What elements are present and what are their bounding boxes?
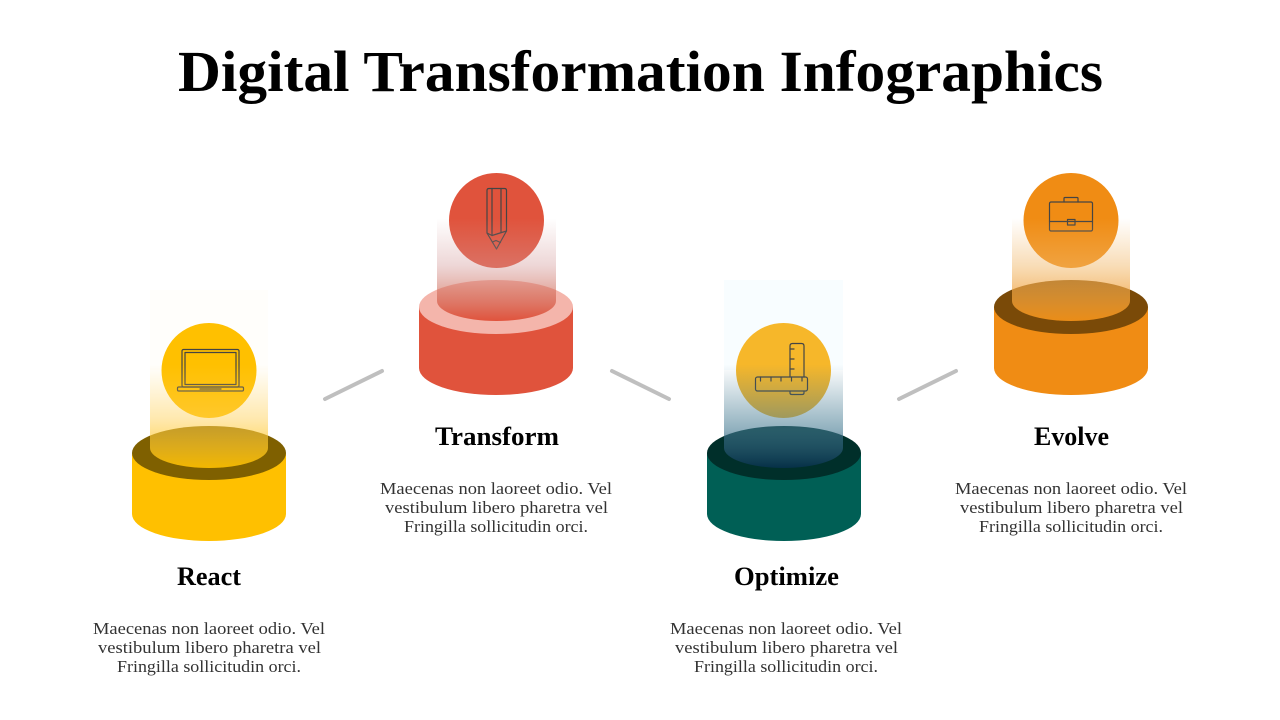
text: transform description: vestibulum libero pharetra vel bbox=[385, 498, 608, 517]
circle: optimize bbox=[736, 323, 831, 418]
icon: pencil bbox=[487, 188, 506, 249]
cylinder base: transform bbox=[419, 280, 573, 395]
heading: transform: Transform bbox=[435, 422, 559, 451]
heading: optimize: Optimize bbox=[734, 562, 839, 591]
title: Digital Transformation Infographics bbox=[178, 39, 1103, 104]
circle: transform bbox=[449, 173, 544, 268]
cylinder base: react bbox=[132, 426, 286, 541]
text: evolve description: Maecenas non laoreet odio. Vel bbox=[955, 479, 1187, 498]
cylinder base: optimize bbox=[707, 426, 861, 541]
glass beam: evolve bbox=[1012, 134, 1130, 321]
text: transform description: Fringilla sollicitudin orci. bbox=[404, 517, 588, 536]
connector: transform to optimize bbox=[612, 371, 669, 399]
text: evolve description bbox=[955, 479, 1187, 536]
icon: laptop bbox=[178, 350, 244, 391]
glass beam: transform bbox=[437, 134, 556, 321]
text: react description: vestibulum libero pharetra vel bbox=[98, 638, 321, 657]
text: transform description: Maecenas non laoreet odio. Vel bbox=[380, 479, 612, 498]
panel: transform bbox=[380, 134, 612, 536]
text: optimize description: Fringilla sollicitudin orci. bbox=[694, 657, 878, 676]
text: optimize description: Maecenas non laoreet odio. Vel bbox=[670, 619, 902, 638]
cylinder base: evolve bbox=[994, 280, 1148, 395]
circle: evolve bbox=[1024, 173, 1118, 268]
heading: react: React bbox=[177, 562, 241, 591]
glass beam: react bbox=[150, 280, 268, 468]
panel: optimize bbox=[670, 280, 902, 676]
panel: evolve bbox=[955, 134, 1187, 536]
panel: react bbox=[93, 280, 325, 676]
text: transform description bbox=[380, 479, 612, 536]
circle: react bbox=[162, 323, 256, 418]
heading: evolve: Evolve bbox=[1034, 422, 1109, 451]
icon: briefcase bbox=[1050, 198, 1092, 231]
text: evolve description: vestibulum libero pharetra vel bbox=[960, 498, 1183, 517]
text: evolve description: Fringilla sollicitudin orci. bbox=[979, 517, 1163, 536]
connector: react to transform bbox=[325, 371, 382, 399]
text: optimize description: vestibulum libero pharetra vel bbox=[675, 638, 898, 657]
text: react description: Maecenas non laoreet odio. Vel bbox=[93, 619, 325, 638]
connector: optimize to evolve bbox=[899, 371, 956, 399]
text: react description bbox=[93, 619, 325, 676]
text: react description: Fringilla sollicitudin orci. bbox=[117, 657, 301, 676]
text: optimize description bbox=[670, 619, 902, 676]
icon: ruler bbox=[756, 344, 808, 394]
glass beam: optimize bbox=[724, 280, 843, 468]
